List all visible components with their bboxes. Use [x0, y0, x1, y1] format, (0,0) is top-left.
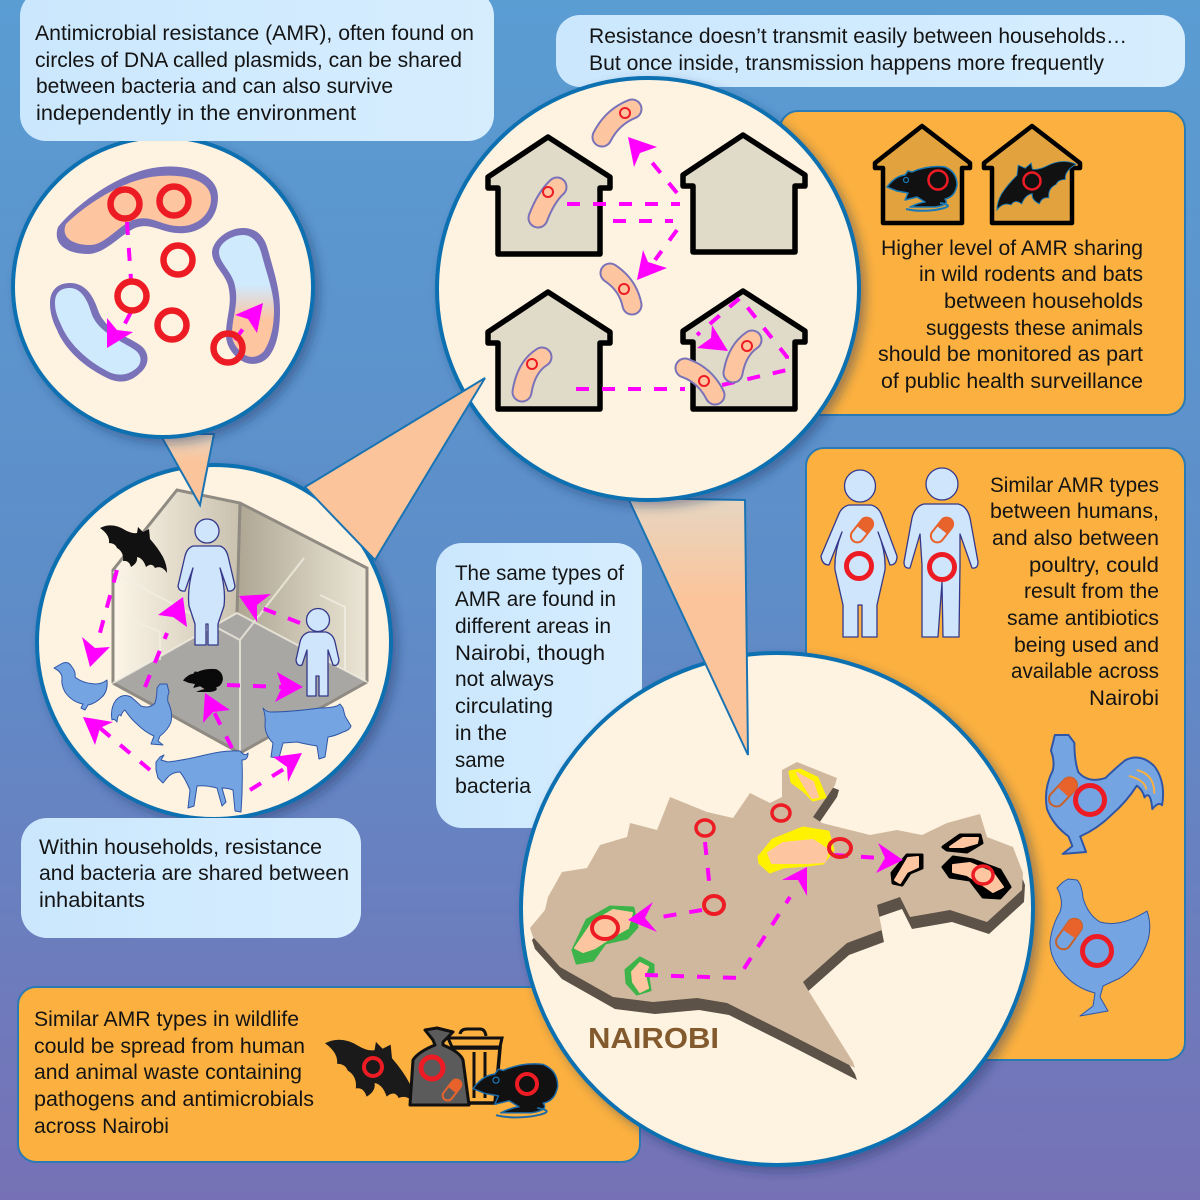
map side shadow	[532, 774, 1025, 1080]
icon: rubbish bag	[410, 1028, 469, 1105]
plasmid rings	[110, 186, 242, 362]
circle: household interior	[37, 465, 391, 819]
callout: household to houses circle	[305, 378, 485, 560]
icon: bat with ring	[325, 1040, 415, 1105]
panel: same AMR types across Nairobi: in the	[455, 722, 507, 745]
text: similar AMR types in humans and poultry: poultry, could	[1029, 554, 1159, 577]
icon: goat	[156, 751, 248, 812]
icon: house with bat	[984, 126, 1080, 223]
bacteria: black	[892, 835, 1010, 898]
icon: man	[904, 468, 978, 637]
panel: same AMR types across Nairobi: The same types of	[455, 562, 624, 585]
circle: transmission between houses	[437, 78, 859, 500]
bacterium: lower left	[50, 283, 148, 382]
icon: rat	[183, 669, 223, 692]
text: wildlife and waste spread: could be spread from human	[34, 1035, 305, 1058]
house cutaway	[113, 490, 367, 753]
text: similar AMR types in humans and poultry: and also between	[992, 527, 1159, 550]
arrows in household	[82, 570, 303, 790]
text: similar AMR types in humans and poultry: between humans,	[990, 500, 1159, 523]
bacterium: top	[57, 167, 218, 254]
resistance rings on map	[592, 805, 993, 939]
text: rodents and bats surveillance	[878, 237, 1143, 393]
arrows: plasmid transfer	[107, 222, 263, 348]
icon: bin	[448, 1029, 502, 1103]
panel: household text: Within households, resistance	[39, 836, 322, 859]
text: rodents and bats surveillance: Higher level of AMR sharing	[881, 237, 1143, 260]
panel: same AMR types across Nairobi: AMR are found in	[455, 588, 616, 611]
text: similar AMR types in humans and poultry: being used and	[1014, 634, 1159, 657]
text: rodents and bats surveillance: should be monitored as part	[878, 343, 1143, 366]
icon: woman	[821, 470, 897, 637]
bacterium: right	[212, 228, 280, 364]
icon: woman	[178, 519, 235, 645]
arrows on map	[628, 842, 903, 978]
panel: plasmids text: between bacteria and can also survive	[36, 75, 393, 98]
text: rodents and bats surveillance: suggests these animals	[926, 317, 1143, 340]
text: similar AMR types in humans and poultry: same antibiotics	[1007, 607, 1159, 630]
circle: plasmids and bacteria	[13, 137, 313, 437]
icon: rooster	[112, 684, 172, 745]
panel: same AMR types across Nairobi: same	[455, 749, 505, 772]
panel: same AMR types across Nairobi: bacteria	[455, 775, 531, 798]
circle: Nairobi map	[521, 653, 1033, 1165]
text: similar AMR types in humans and poultry: Similar AMR types	[990, 474, 1159, 497]
panel: household text: and bacteria are shared between	[39, 862, 349, 885]
panel: household text	[21, 818, 361, 938]
text: rodents and bats surveillance: of public health surveillance	[881, 370, 1143, 393]
bacteria: green	[573, 907, 653, 994]
panel: wild rodents and bats	[780, 111, 1185, 415]
map of Nairobi	[530, 762, 1023, 1068]
label: NAIROBI: NAIROBI	[588, 1023, 719, 1055]
text: wildlife and waste spread: pathogens and antimicrobials	[34, 1088, 314, 1111]
houses	[488, 135, 805, 409]
panel: same AMR types across Nairobi	[436, 543, 642, 828]
icon: rooster	[1046, 735, 1163, 854]
text: similar AMR types in humans and poultry: Nairobi	[1089, 687, 1159, 710]
callout: household to bacteria circle	[160, 434, 214, 505]
bacteria in houses	[522, 108, 752, 395]
panel: plasmids text: Antimicrobial resistance (AMR), often found on	[35, 22, 474, 45]
panel: transmission text	[556, 15, 1185, 87]
panel: same AMR types across Nairobi: different areas in	[455, 615, 611, 638]
panel: same AMR types across Nairobi: circulating	[455, 695, 553, 718]
icon: house with rat	[875, 126, 970, 223]
bacteria: yellow	[759, 770, 833, 872]
panel: plasmids text: independently in the environment	[36, 102, 356, 125]
text: similar AMR types in humans and poultry: result from the	[1024, 580, 1159, 603]
text: similar AMR types in humans and poultry: available across	[1011, 660, 1159, 683]
panel: same AMR types across Nairobi: not always	[455, 668, 554, 691]
panel: wildlife and waste	[18, 987, 640, 1162]
panel: transmission text: Resistance doesn’t transmit easily between households…	[589, 25, 1127, 48]
icon: rat with ring	[473, 1064, 558, 1117]
arrows between houses	[567, 137, 787, 389]
text: rodents and bats surveillance: between households	[944, 290, 1143, 313]
icon: duck	[54, 663, 107, 710]
text: wildlife and waste spread	[34, 1008, 314, 1138]
panel: plasmids text: circles of DNA called plasmids, can be shared	[35, 49, 462, 72]
icon: bat	[100, 525, 167, 573]
panel: humans and poultry	[806, 448, 1185, 1060]
panel: plasmids text	[20, 0, 494, 141]
text: rodents and bats surveillance: in wild rodents and bats	[919, 263, 1143, 286]
text: wildlife and waste spread: across Nairobi	[34, 1115, 169, 1138]
callout: map to houses	[628, 498, 748, 755]
text: similar AMR types in humans and poultry	[990, 474, 1159, 710]
text: wildlife and waste spread: Similar AMR types in wildlife	[34, 1008, 299, 1031]
icon: child	[296, 608, 339, 696]
panel: household text: inhabitants	[39, 889, 145, 912]
icon: pig	[263, 704, 351, 759]
panel: same AMR types across Nairobi: Nairobi, though	[455, 642, 605, 665]
text: wildlife and waste spread: and animal waste containing	[34, 1061, 302, 1084]
panel: transmission text: But once inside, transmission happens more frequently	[589, 52, 1105, 75]
icon: hen	[1050, 879, 1150, 1016]
